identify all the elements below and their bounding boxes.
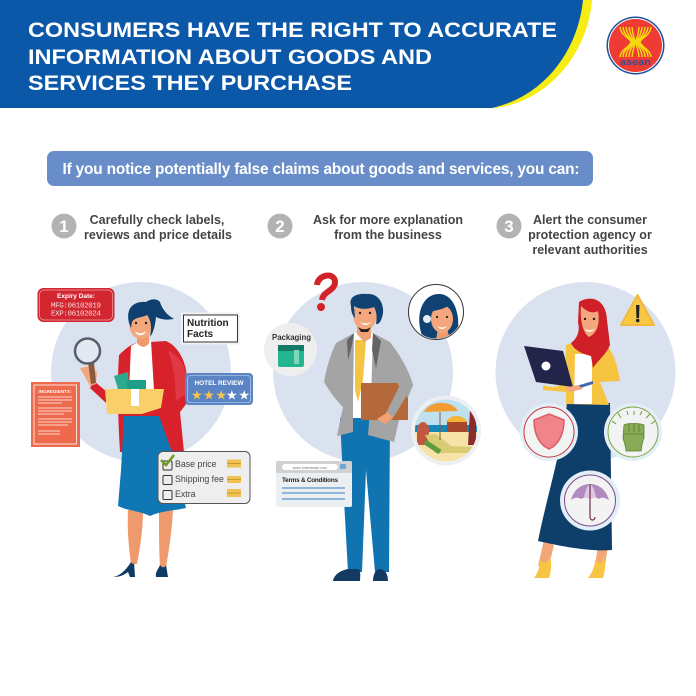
icon: question mark (317, 276, 335, 311)
woman shopper figure (75, 299, 187, 577)
nutrition facts label: Facts (187, 329, 214, 340)
price checklist (158, 452, 250, 504)
icon: umbrella badge (560, 470, 620, 530)
nutrition facts label: Nutrition (187, 318, 229, 329)
expiry date label: EXP:06102024 (51, 310, 101, 318)
title: INFORMATION ABOUT GOODS AND (28, 46, 432, 69)
step 3: relevant authorities (532, 243, 648, 257)
hotel review card: ★★★ (191, 388, 227, 402)
step 2: 2 (275, 217, 285, 236)
icon: raised fist badge (604, 403, 662, 461)
step 1: Carefully check labels, (90, 213, 224, 227)
panel: check labels illustration (31, 282, 253, 577)
step 2 (268, 213, 463, 242)
ingredients sheet: INGREDIENTS: (38, 389, 72, 394)
ingredients sheet (31, 382, 80, 447)
price checklist: Base price (175, 459, 217, 469)
hotel review card (185, 373, 253, 405)
icon: support agent (408, 284, 464, 340)
step 1: 1 (59, 217, 69, 236)
step 3 (496, 213, 652, 257)
price checklist: Extra (175, 489, 196, 499)
banner (47, 151, 593, 186)
businessman figure (324, 294, 413, 581)
price checklist: Shipping fee (175, 474, 224, 484)
packaging badge: Packaging (272, 333, 311, 342)
expiry date label (38, 288, 114, 322)
packaging badge (264, 323, 317, 376)
step 2: from the business (334, 228, 442, 242)
title: SERVICES THEY PURCHASE (28, 72, 352, 95)
title: CONSUMERS HAVE THE RIGHT TO ACCURATE (28, 19, 557, 42)
hotel beach photo badge (411, 396, 481, 466)
icon: ASEAN logo: asean (620, 57, 651, 67)
step 3: protection agency or (528, 228, 652, 242)
expiry date label: MFG:06102019 (51, 302, 101, 310)
terms and conditions window: Terms & Conditions (282, 477, 338, 484)
hotel review card: HOTEL REVIEW (194, 380, 244, 387)
icon: ASEAN logo (606, 16, 664, 74)
terms and conditions window (276, 461, 352, 507)
nutrition facts label (181, 312, 240, 344)
step 3: Alert the consumer (533, 213, 647, 227)
panel: alert authorities illustration (496, 282, 676, 578)
panel: ask business illustration (264, 276, 481, 581)
step 3: 3 (504, 217, 514, 236)
icon: warning triangle (621, 295, 654, 325)
step 2: Ask for more explanation (313, 213, 463, 227)
banner: If you notice potentially false claims about goods and services, you can: (62, 161, 580, 178)
terms and conditions window: www.hoteldeals.com (293, 466, 327, 470)
step 1: reviews and price details (84, 228, 232, 242)
woman in hijab figure (524, 299, 620, 578)
step 1 (52, 213, 232, 242)
expiry date label: Expiry Date: (57, 293, 95, 300)
hotel review card: ★★ (226, 388, 250, 402)
icon: shield badge (520, 403, 578, 461)
title (28, 19, 557, 95)
header band (0, 0, 592, 108)
